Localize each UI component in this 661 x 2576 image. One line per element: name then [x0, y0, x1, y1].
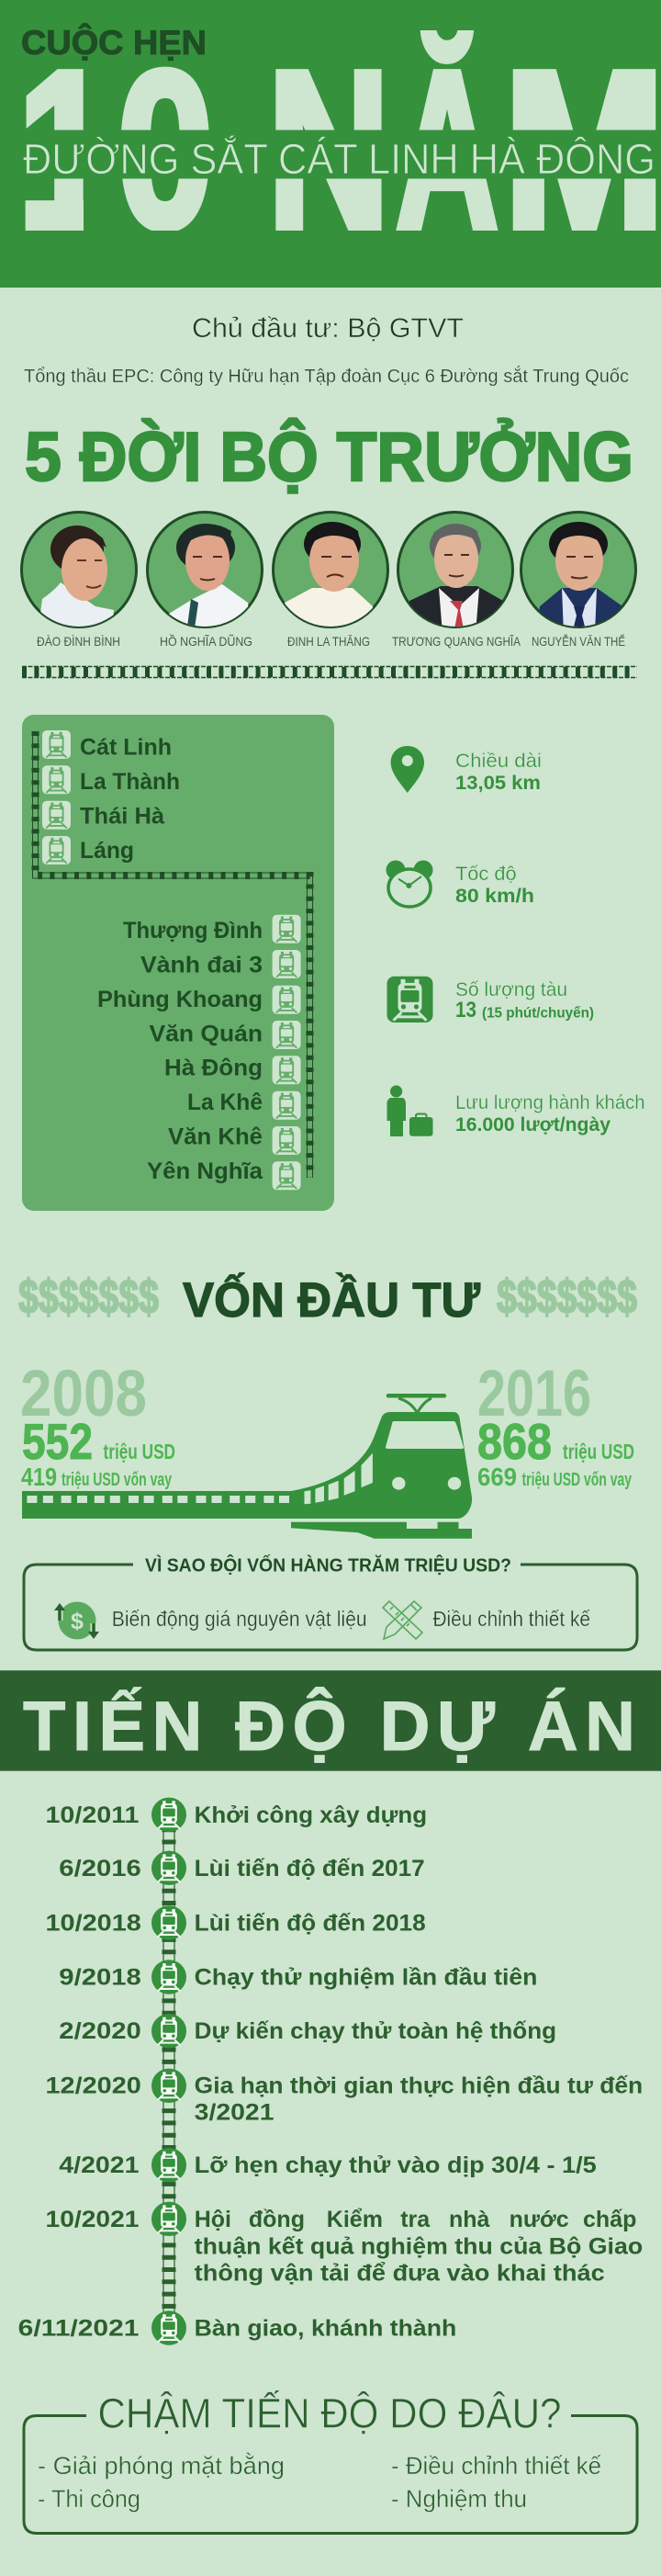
portrait names — [37, 633, 625, 649]
illustration: train — [22, 1395, 472, 1539]
timeline events: nhà — [449, 2207, 490, 2232]
icon: money flow — [54, 1602, 99, 1639]
timeline events — [195, 1802, 643, 2341]
figures: 2016: 868 — [477, 1413, 552, 1470]
station names: Thái Hà — [80, 804, 164, 830]
text: EPC contractor: Tổng thầu EPC: Công ty Hữu hạn Tập đoàn Cục 6 Đường sắt Trung Quốc — [24, 366, 629, 387]
list of causes: - Thi công — [38, 2485, 140, 2513]
big title: 10 NĂM: N — [267, 24, 390, 275]
timeline events: Hội — [195, 2207, 231, 2232]
figures: 2008: 552 — [22, 1413, 93, 1470]
pantograph — [388, 1395, 444, 1413]
timeline dates — [18, 1802, 141, 2341]
timeline dates: 6/2016 — [59, 1856, 141, 1881]
timeline dates: 2/2020 — [59, 2018, 141, 2044]
stat: length: 13,05 km — [455, 773, 541, 794]
big title: 10 NĂM: 0 — [117, 24, 214, 275]
station names: Hà Đông — [164, 1056, 263, 1081]
timeline — [18, 1798, 643, 2345]
portrait names: ĐÀO ĐÌNH BÌNH — [37, 634, 120, 649]
portrait names: HỒ NGHĨA DŨNG — [160, 633, 252, 649]
station names: La Thành — [80, 769, 180, 795]
timeline events: tra — [400, 2207, 431, 2232]
portrait names: NGUYỄN VĂN THỂ — [532, 633, 625, 649]
timeline events: Lỡ hẹn chạy thử vào dịp 30/4 - 1/5 — [195, 2152, 597, 2178]
list of causes: - Điều chỉnh thiết kế — [391, 2452, 601, 2480]
timeline dates: 10/2018 — [46, 1911, 141, 1937]
panel title: CHẬM TIẾN ĐỘ DO ĐÂU? — [97, 2390, 562, 2437]
timeline events: Dự kiến chạy thử toàn hệ thống — [195, 2018, 556, 2044]
icon: map pin — [391, 746, 424, 793]
list of causes: - Giải phóng mặt bằng — [38, 2451, 285, 2480]
panel: station route — [22, 715, 334, 1211]
figures: 2008 — [20, 1358, 175, 1491]
icon: ruler and pencil — [383, 1601, 422, 1639]
figures: 2008: triệu USD vốn vay — [62, 1470, 173, 1490]
timeline dates: 10/2021 — [46, 2207, 140, 2232]
timeline events: thông vận tải để đưa vào khai thác — [195, 2261, 605, 2287]
title: cuộc hẹn: CUỘC HẸN — [21, 23, 207, 62]
dollar row left: $$$$$$$ — [18, 1271, 159, 1324]
train body — [22, 1412, 472, 1519]
stat: length: Chiều dài — [455, 751, 542, 772]
station names: Yên Nghĩa — [147, 1158, 263, 1184]
train headlights — [392, 1477, 405, 1490]
timeline events: Lùi tiến độ đến 2018 — [195, 1911, 426, 1937]
figures: 2008: 419 — [21, 1463, 57, 1491]
timeline events: Gia hạn thời gian thực hiện đầu tư đến — [195, 2073, 643, 2099]
station names — [80, 735, 263, 1184]
portrait: Nguyễn Văn Thể — [521, 513, 635, 634]
station names: Thượng Đình — [123, 918, 263, 943]
railway divider — [22, 667, 637, 678]
header band behind subtitle — [0, 130, 661, 178]
icon: money flow: $ — [71, 1609, 84, 1634]
timeline dates: 9/2018 — [59, 1965, 141, 1991]
icon: passenger with suitcase — [387, 1085, 433, 1136]
stat: speed — [386, 860, 534, 907]
timeline dates: 4/2021 — [59, 2152, 140, 2178]
timeline events: chấp — [583, 2207, 636, 2232]
timeline dates: 10/2011 — [46, 1802, 140, 1828]
text: investor: Chủ đầu tư: Bộ GTVT — [192, 313, 464, 344]
stat: passengers: Lưu lượng hành khách — [455, 1092, 645, 1113]
station icons: upper — [42, 730, 71, 864]
figures: 2016: 2016 — [477, 1358, 591, 1430]
stat: speed: 80 km/h — [455, 886, 534, 907]
stat: trains — [387, 977, 594, 1022]
stat: trains: Số lượng tàu — [455, 979, 567, 1000]
list of causes — [38, 2451, 601, 2513]
train carriage windows — [27, 1453, 373, 1504]
stat: passengers — [387, 1085, 645, 1136]
station names: La Khê — [187, 1090, 263, 1115]
timeline events: nước — [510, 2207, 569, 2232]
figures: 2008: triệu USD — [103, 1440, 175, 1463]
timeline events: đồng — [249, 2207, 305, 2232]
portrait: Trương Quang Nghĩa — [398, 513, 512, 634]
panel: causes of delay — [24, 2390, 637, 2534]
panel: header — [0, 0, 661, 288]
big title: 10 NĂM: Ă — [396, 24, 499, 275]
big title: 10 NĂM — [26, 30, 655, 231]
timeline events: thuận kết quả nghiệm thu của Bộ Giao — [195, 2233, 643, 2259]
timeline train icons — [158, 1801, 180, 2343]
timeline events: Kiểm — [327, 2207, 383, 2232]
train windscreen — [386, 1421, 464, 1449]
timeline events: Lùi tiến độ đến 2017 — [195, 1856, 425, 1881]
icon: train — [387, 977, 433, 1022]
figures: 2016: 669 — [477, 1463, 517, 1491]
timeline events: 3/2021 — [195, 2100, 274, 2126]
stat: passengers: 16.000 lượt/ngày — [455, 1114, 611, 1135]
route track — [33, 731, 312, 1178]
stat: speed: Tốc độ — [455, 864, 517, 885]
stat: trains: (15 phút/chuyến) — [482, 1006, 594, 1022]
timeline markers — [151, 1798, 186, 2345]
figures: 2008: 2008 — [20, 1358, 147, 1430]
timeline track — [163, 1827, 174, 2315]
list of causes: - Nghiệm thu — [391, 2485, 527, 2513]
timeline dates: 6/11/2021 — [18, 2315, 140, 2341]
portrait: Đào Đình Bình — [22, 513, 136, 634]
timeline events: Chạy thử nghiệm lần đầu tiên — [195, 1965, 537, 1991]
timeline events: Khởi công xây dựng — [195, 1802, 427, 1828]
timeline dates: 12/2020 — [46, 2073, 141, 2099]
portrait: Hồ Nghĩa Dũng — [147, 513, 263, 634]
stat: length — [391, 746, 542, 794]
panel: why capital increased — [24, 1554, 637, 1650]
icon: alarm clock — [386, 860, 433, 907]
station names: Vành đai 3 — [140, 953, 263, 978]
station icons: lower — [273, 915, 301, 1190]
portrait: Đinh La Thăng — [274, 513, 387, 634]
timeline events: Bàn giao, khánh thành — [195, 2315, 456, 2341]
rail under train — [291, 1522, 472, 1539]
text: design adjustment: Điều chỉnh thiết kế — [433, 1607, 590, 1631]
text: material prices: Biến động giá nguyên vật liệu — [112, 1607, 367, 1631]
heading: 5 đời bộ trưởng: 5 ĐỜI BỘ TRƯỞNG — [25, 418, 633, 495]
heading: vốn đầu tư: VỐN ĐẦU TƯ — [183, 1272, 480, 1328]
station names: Văn Quán — [149, 1022, 263, 1047]
portrait names: TRƯƠNG QUANG NGHĨA — [392, 634, 521, 649]
station names: Cát Linh — [80, 735, 172, 761]
station names: Văn Khê — [168, 1124, 263, 1150]
stat: trains: 13 — [455, 998, 476, 1022]
station names: Phùng Khoang — [97, 987, 263, 1012]
figures: 2016: triệu USD — [563, 1440, 634, 1463]
panel title: VÌ SAO ĐỘI VỐN HÀNG TRĂM TRIỆU USD? — [145, 1554, 511, 1576]
station names: Láng — [80, 838, 134, 864]
portrait names: ĐINH LA THĂNG — [287, 634, 370, 649]
banner: tiến độ dự án: TIẾN ĐỘ DỰ ÁN — [23, 1688, 635, 1766]
big title: 10 NĂM: 1 — [17, 24, 112, 275]
figures: 2016 — [477, 1358, 634, 1491]
